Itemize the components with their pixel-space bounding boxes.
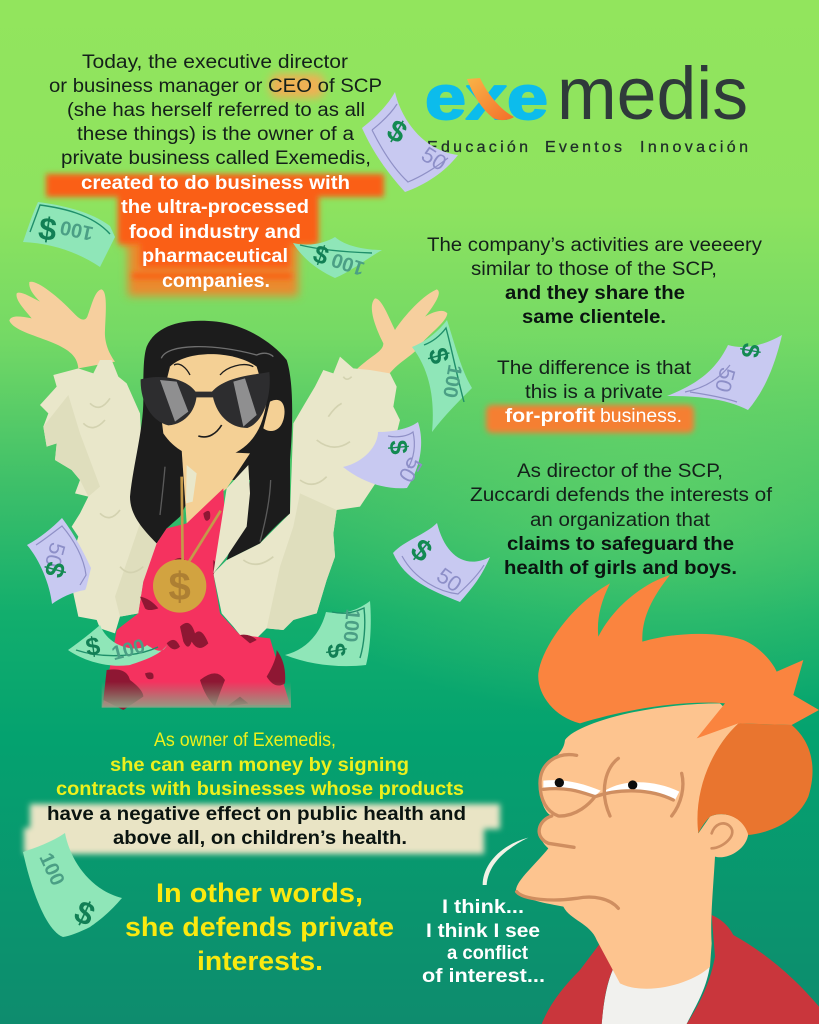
- shirt: [602, 965, 710, 1024]
- text block: for-profit difference: [497, 358, 692, 427]
- illustration: woman with sunglasses: [9, 282, 447, 710]
- text block: intro: or business manager or CEO of SCP: [49, 76, 382, 97]
- bill: lavender 50 over coat: 50: [394, 453, 427, 487]
- speech arc: [483, 838, 528, 885]
- highlight: CEO: [270, 74, 324, 98]
- hair strand highlights: [160, 467, 271, 542]
- dark back hair: [697, 723, 813, 835]
- bill: lavender 50 right: [667, 335, 782, 410]
- text block: similar activities: [427, 235, 763, 328]
- text block: similar activities: similar to those of the SCP,: [471, 259, 717, 280]
- text block: for-profit difference: for-profit: [505, 406, 596, 427]
- bill: lavender 50 center: 50: [432, 563, 466, 597]
- text block: intro: Today, the executive director: [82, 52, 349, 73]
- text block: owner of Exemedis: As owner of Exemedis,: [154, 730, 336, 751]
- bill: green 100 small: 100: [329, 248, 367, 279]
- text block: director of SCP: As director of the SCP,: [517, 461, 723, 482]
- bill: green 100 small: $: [309, 240, 332, 271]
- dress: [103, 488, 290, 707]
- text block: director of SCP: an organization that: [530, 510, 711, 531]
- text block: intro: food industry and: [129, 222, 301, 243]
- bill: green 100 bottom left: [23, 833, 122, 937]
- text block: owner of Exemedis: [47, 730, 466, 849]
- fur collar: [186, 465, 250, 573]
- text block: for-profit difference: The difference is that: [497, 358, 692, 379]
- smile: [198, 425, 222, 437]
- ear: [263, 400, 285, 431]
- bill: green 100 by dress: [68, 625, 167, 666]
- illustration: Fry squinting: [483, 575, 819, 1024]
- nose outline: [539, 816, 574, 847]
- bill: green 100 bottom left: 100: [34, 850, 68, 889]
- hair: [130, 321, 292, 560]
- bill: green 100 at right hand: [412, 320, 472, 432]
- logo: exemedis: exe: [425, 64, 548, 133]
- highlight: pale strip behind black text: [24, 804, 500, 854]
- speech text: a conflict: [447, 943, 529, 964]
- text block: owner of Exemedis: have a negative effect on public health and: [47, 804, 466, 825]
- text block: intro: [49, 52, 382, 292]
- bill: lavender 50 top: 50: [417, 142, 451, 176]
- text block: director of SCP: [470, 461, 773, 579]
- logo: exemedis: medis: [557, 52, 748, 135]
- logo: exemedis: Educación: [427, 139, 528, 156]
- face: [160, 354, 267, 459]
- text block: intro: private business called Exemedis,: [61, 148, 371, 169]
- text block: director of SCP: health of girls and boys.: [504, 558, 737, 579]
- left hand: [9, 282, 115, 368]
- bill: lavender 50 left: [27, 518, 91, 604]
- text block: intro: (she has herself referred to as all: [67, 100, 365, 121]
- hair left lock fill: [153, 430, 187, 543]
- neck and chest: [182, 450, 250, 523]
- dress fade: [102, 682, 291, 708]
- bill: green 100 top left: [23, 202, 115, 267]
- bill: green 100 bottom left: $: [69, 893, 101, 933]
- bill: green 100 right of dress: $: [321, 641, 351, 660]
- text block: intro: pharmaceutical: [142, 246, 288, 267]
- logo: exemedis: Innovación: [640, 139, 748, 156]
- bill: green 100 at right hand: $: [422, 344, 456, 367]
- text block: intro: these things) is the owner of a: [77, 124, 354, 145]
- bill: green 100 right of dress: [285, 601, 371, 666]
- text block: intro: companies.: [162, 271, 270, 292]
- bill: green 100 top left: $: [36, 210, 59, 248]
- text block: similar activities: and they share the: [505, 283, 685, 304]
- sunglasses: [141, 372, 270, 428]
- eyes: [543, 778, 679, 800]
- statement: defends private interests: she defends private: [125, 912, 394, 942]
- bill: green 100 by dress: $: [84, 632, 102, 662]
- text block: similar activities: The company’s activities are veeeery: [427, 235, 763, 256]
- text block: director of SCP: claims to safeguard the: [507, 534, 734, 555]
- bill: green 100 top left: 100: [58, 216, 95, 244]
- text block: for-profit difference: business.: [600, 406, 682, 427]
- text block: intro: created to do business with: [81, 173, 350, 194]
- logo: exemedis: [425, 52, 748, 156]
- statement: defends private interests: [125, 878, 394, 976]
- bill: green 100 at right hand: 100: [438, 363, 466, 399]
- fur coat: [40, 357, 400, 638]
- bill: lavender 50 top: [362, 92, 458, 192]
- eyelids and brows: [540, 755, 683, 816]
- gold medal: $: [169, 565, 191, 609]
- mouth: [517, 892, 618, 908]
- bill: lavender 50 center: $: [404, 533, 438, 569]
- speech text: I think I see: [426, 921, 540, 942]
- ear detail: [712, 823, 732, 848]
- text block: intro: the ultra-processed: [121, 197, 309, 218]
- logo: exemedis: Eventos: [545, 139, 622, 156]
- bill: lavender 50 top: $: [381, 113, 412, 150]
- text block: owner of Exemedis: contracts with businesses whose products: [56, 779, 464, 800]
- text block: director of SCP: Zuccardi defends the interests of: [470, 485, 773, 506]
- eyebrows: [174, 364, 253, 375]
- speech text: of interest...: [422, 966, 545, 987]
- bill: green 100 right of dress: 100: [339, 608, 363, 643]
- hair: [538, 575, 819, 738]
- text block: similar activities: same clientele.: [522, 307, 666, 328]
- hair fringe: [161, 347, 273, 358]
- text block: owner of Exemedis: above all, on children’s health.: [113, 828, 407, 849]
- speech text: [422, 897, 545, 987]
- bill: green 100 by dress: 100: [109, 635, 147, 665]
- face and neck: [516, 703, 748, 989]
- text block: owner of Exemedis: she can earn money by signing: [110, 755, 409, 776]
- bill: lavender 50 over coat: [343, 422, 427, 488]
- highlight: orange block behind text: [46, 174, 384, 296]
- lanyard: [182, 477, 221, 563]
- highlight: for-profit: [486, 405, 694, 433]
- right hand: [357, 289, 447, 375]
- gold medal: [153, 559, 206, 613]
- bill: lavender 50 left: 50: [40, 540, 70, 570]
- speech text: I think...: [442, 897, 524, 918]
- dress pattern: [103, 511, 285, 710]
- bill: lavender 50 right: 50: [710, 365, 740, 395]
- statement: defends private interests: interests.: [197, 946, 323, 976]
- bill: lavender 50 over coat: $: [383, 439, 413, 456]
- jacket: [542, 915, 819, 1024]
- statement: defends private interests: In other words,: [156, 878, 363, 908]
- bill: lavender 50 left: $: [39, 559, 72, 581]
- bill: lavender 50 center: [393, 523, 490, 602]
- text block: for-profit difference: this is a private: [525, 382, 663, 403]
- bill: lavender 50 right: $: [735, 341, 765, 360]
- bill: green 100 small: [293, 237, 382, 279]
